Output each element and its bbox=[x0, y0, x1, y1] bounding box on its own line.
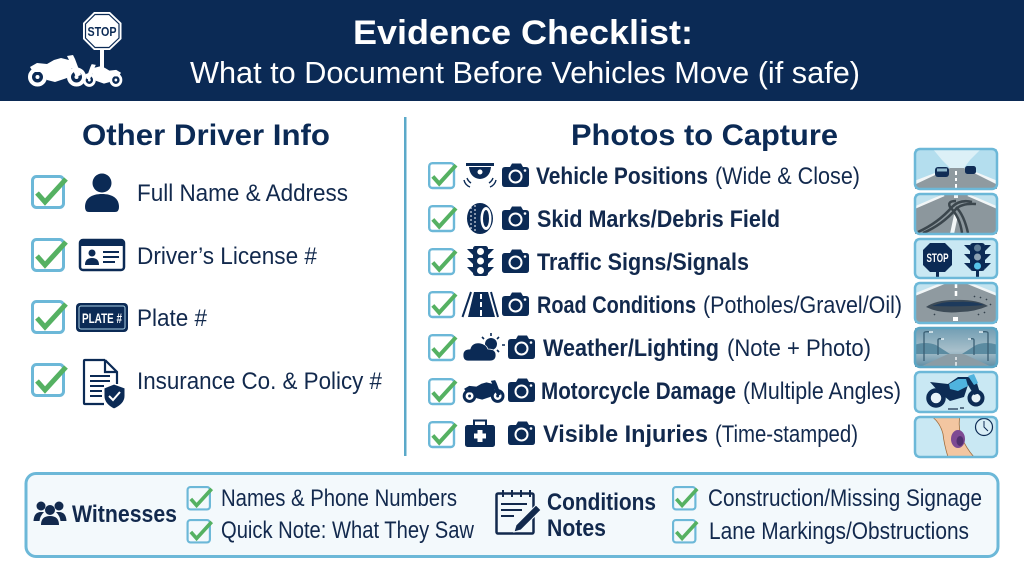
photo: damaged motorcycle bbox=[914, 371, 998, 412]
row: motorcycle damage bbox=[429, 378, 901, 405]
subtitle: What to Document Before Vehicles Move (if safe) bbox=[190, 55, 860, 90]
label: conditions notes: Conditions bbox=[547, 489, 656, 516]
row: vehicle positions: Vehicle Positions bbox=[536, 163, 708, 190]
label: conditions notes bbox=[547, 489, 656, 542]
item: full name and address: Full Name & Address bbox=[137, 180, 348, 207]
row: vehicle positions: (Wide & Close) bbox=[715, 163, 860, 190]
photo: stop sign and traffic light bbox=[914, 238, 998, 279]
photo: street lights at dusk bbox=[914, 327, 998, 367]
item: insurance bbox=[32, 360, 383, 409]
row: road conditions: Road Conditions bbox=[537, 292, 696, 319]
label: conditions notes: Notes bbox=[547, 515, 606, 542]
header banner bbox=[0, 0, 1024, 101]
photo: road with vehicles bbox=[914, 148, 998, 189]
row: weather lighting bbox=[429, 333, 871, 362]
photo: skid marks bbox=[914, 193, 998, 234]
item: lane markings and obstructions: Lane Markings/Obstructions bbox=[709, 518, 969, 545]
row: motorcycle damage: Motorcycle Damage bbox=[541, 378, 736, 405]
heading: photos to capture: Photos to Capture bbox=[571, 119, 838, 152]
item: drivers license: Driver’s License # bbox=[137, 243, 318, 270]
row: traffic signs: Traffic Signs/Signals bbox=[537, 249, 749, 276]
item: names and phone numbers: Names & Phone Numbers bbox=[221, 485, 457, 512]
heading: other driver info: Other Driver Info bbox=[82, 119, 330, 152]
item: insurance: Insurance Co. & Policy # bbox=[137, 368, 383, 395]
row: visible injuries bbox=[429, 420, 858, 448]
photo: bruised arm with clock bbox=[914, 416, 998, 457]
row: visible injuries: Visible Injuries bbox=[543, 421, 708, 448]
row: skid marks: Skid Marks/Debris Field bbox=[537, 206, 780, 233]
icon: stop sign and motorcycles bbox=[30, 12, 122, 85]
row: traffic signs bbox=[429, 246, 749, 276]
row: motorcycle damage: (Multiple Angles) bbox=[743, 378, 901, 405]
divider bbox=[404, 117, 406, 456]
row: weather lighting: Weather/Lighting bbox=[543, 335, 719, 362]
title: Evidence Checklist: bbox=[353, 14, 693, 52]
icon: witnesses group bbox=[34, 502, 66, 525]
row: road conditions: (Potholes/Gravel/Oil) bbox=[703, 292, 902, 319]
item: plate bbox=[32, 302, 208, 332]
panel: witnesses and conditions notes bbox=[26, 474, 998, 556]
row: weather lighting: (Note + Photo) bbox=[727, 335, 871, 362]
item: plate: Plate # bbox=[137, 305, 208, 332]
item: construction and missing signage: Construction/Missing Signage bbox=[708, 485, 982, 512]
photo: stop sign and traffic light: STOP bbox=[926, 251, 948, 265]
row: road conditions bbox=[429, 292, 902, 319]
item: full name and address bbox=[32, 174, 348, 212]
row: skid marks bbox=[429, 203, 780, 234]
icon: stop sign and motorcycles: STOP bbox=[88, 25, 116, 39]
icon: notepad and pen bbox=[496, 490, 541, 534]
item: drivers license bbox=[32, 240, 318, 270]
label: witnesses: Witnesses bbox=[72, 501, 177, 528]
row: visible injuries: (Time-stamped) bbox=[715, 421, 858, 448]
panel: photos to capture bbox=[429, 119, 998, 457]
photo: pothole bbox=[914, 282, 998, 323]
item: quick note: Quick Note: What They Saw bbox=[221, 517, 475, 544]
row: vehicle positions bbox=[429, 163, 860, 190]
panel: other driver info bbox=[32, 119, 383, 409]
item: plate: PLATE # bbox=[82, 310, 122, 326]
